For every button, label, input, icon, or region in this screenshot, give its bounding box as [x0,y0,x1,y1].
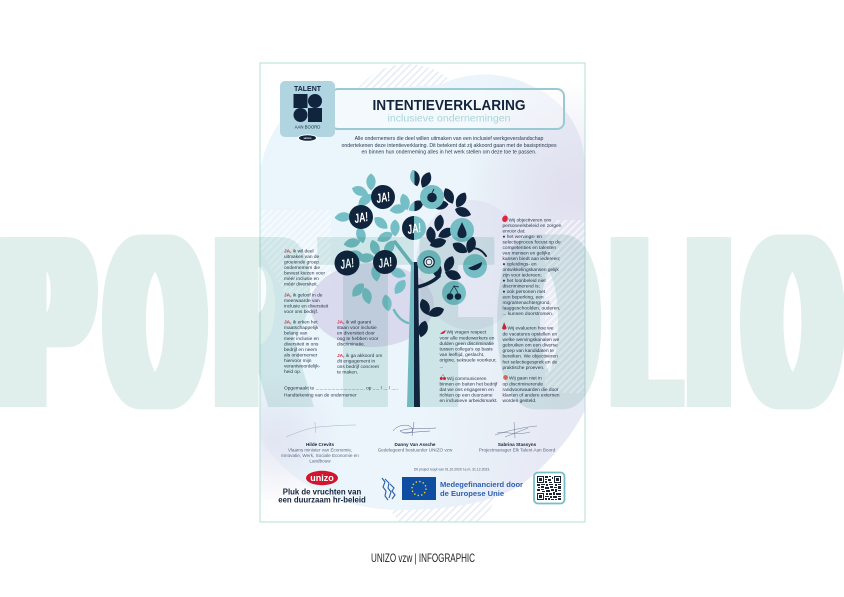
text block: evalueren: bereiken. We objectiveren [502,354,558,360]
text block: objectiveren: Wij objectiveren ons [508,218,552,224]
slogan: een duurzaam hr-beleid [278,496,366,504]
watermark: PORTFOLIO: O [506,184,592,460]
slogan: Pluk de vruchten van [283,488,361,496]
dark leaves [414,170,476,338]
watermark: PORTFOLIO: R [220,184,302,460]
tree illustration: JA! [377,254,394,271]
text block: evalueren: de vacatures opstellen en [502,331,557,337]
text block: communiceren: Wij communiceren [447,376,487,382]
text block: JA 3: diversiteit in ons [284,342,319,348]
text block: JA 3: ik erken het [291,320,318,326]
text block: JA 1: méér diversiteit. [284,281,318,287]
text block: objectiveren: ontwikkelingskansen gelijk [502,267,559,273]
text block: JA 4: JA, [337,320,345,326]
text block: communiceren: binnen en buiten het bedrijf [440,381,498,387]
text block: JA 3: bedrijf en neem [284,347,317,353]
text block: JA 5: dit engagement in [337,358,375,364]
text block: respect: Wij vragen respect [446,330,487,336]
names and roles: Gedelegeerd bestuurder UNIZO vzw [378,448,453,452]
text block: JA 3: belang van [284,331,308,337]
EU funding text: de Europese Unie [440,489,504,498]
text block: JA 1: JA, [284,248,292,254]
text block: JA 4: staan voor inclusie [337,325,377,331]
text block: signature line: Handtekening van de ondernemer [284,393,357,399]
signature: Danny Van Assche [393,422,436,436]
logo: Talent aan boord: TALENT [294,86,322,93]
text block: objectiveren: ervoor dat: [502,229,525,235]
text block: JA 2: JA, [284,293,292,299]
names and roles: Sabrina Stassyns [498,442,537,447]
text block: JA 3: meer inclusie en [284,336,319,342]
names and roles: Danny Van Assche [395,442,436,447]
text block: objectiveren: van mensen en gelijke [502,251,551,257]
text block: signature line: Opgemaakt te ..................................... op ..... / ... / ..... [284,386,398,392]
watermark: PORTFOLIO: O [749,184,836,460]
text block: JA 3: JA, [284,320,292,326]
icon: coconut [503,375,508,380]
text block: evalueren: het selectiegesprek en de [502,359,557,365]
text block: objectiveren: zijn voor iedereen; [502,273,542,279]
text block: objectiveren: discriminerend is; [502,284,540,290]
text block: JA 3: maatschappelijk [284,325,319,331]
text block: JA 5: ik ga akkoord om [344,353,382,359]
text block: JA 4: ik wil garant [344,320,372,326]
fruit badge: apple [420,185,444,209]
text block: communiceren: en inclusieve arbeidsmarkt. [440,398,498,404]
subtitle: inclusieve ondernemingen [388,114,510,124]
text block: niet discrimineren: Wij gaan niet in [509,376,542,382]
signature: Hilde Crevits [286,422,356,437]
text block: objectiveren: ● opleidings- en [502,262,537,268]
text block: objectiveren: ● het loonbeleid niet [502,278,546,284]
EU funding text: Medegefinancierd door [440,480,523,489]
EU flag [402,477,436,500]
panel: poster border [260,63,585,522]
intro text: en binnen hun onderneming alles in het werk stellen om deze toe te passen. [361,150,537,156]
title: INTENTIEVERKLARING [372,98,526,114]
text block: objectiveren: personeelsbeleid en zorgen [502,223,562,229]
text block: JA 2: inclusie en diversiteit [284,304,329,310]
names and roles [281,442,556,464]
text block: JA 5: ons bedrijf concreet [337,364,380,370]
signature: Sabrina Stassyns [495,422,537,438]
caption: UNIZO vzw | INFOGRAPHIC [371,551,475,565]
names and roles: Innovatie, Werk, Sociale Economie en [281,453,359,458]
text block: evalueren: Wij evalueren hoe we [508,326,554,332]
panel: poster background [260,63,585,538]
tree illustration: JA! [353,209,370,226]
text block: objectiveren: selectieproces focust op de [502,240,561,246]
text block: objectiveren: ● het wervings- en [502,234,542,240]
names and roles: Projectmanager Elk Talent Aan Boord [479,448,556,452]
logo: unizo: unizo [310,473,334,483]
text block: JA 3: hiervoor mijn [284,358,312,364]
icon: cherries [440,374,446,380]
tree illustration [334,169,487,407]
project dates: Dit project loopt van 01.10.2020 t.e.m. 31.12.2023. [414,468,490,472]
logo: unizo [306,471,338,485]
text block: JA 3: heid op. [284,369,301,375]
JA badges [334,185,426,276]
tree illustration: JA! [375,189,392,206]
teal leaves [334,169,426,312]
text block: evalueren: praktische proeven. [502,365,544,371]
text block: JA 1: uitmaken van de [284,254,320,260]
text block: respect: origine, seksuele voorkeur, [440,358,497,364]
text block: JA 2: meerwaarde van [284,298,320,304]
watermark: PORTFOLIO: O [111,184,199,460]
text block: objectiveren: ● ook personen met [502,289,546,295]
text block: niet discrimineren: randvoorwaarden die door [502,387,559,393]
fruit badge: pear [450,218,474,242]
text block: objectiveren: competenties en talenten [502,245,556,251]
text block: evalueren: groep van kandidaten te [502,348,554,354]
watermark: PORTFOLIO: I [693,184,725,460]
text block: objectiveren: kansen biedt aan iedereen; [502,256,560,262]
intro text: Alle ondernemers die deel willen uitmaken van een inclusief werkgeverslandschap [355,136,544,142]
text block: evalueren: gebruiken om een diverse [502,342,558,348]
text block: respect: voor alle medewerkers en [440,335,495,341]
watermark: PORTFOLIO: F [425,184,486,460]
text block: niet discrimineren: worden gesteld. [502,398,536,404]
intro text: ondertekenen deze intentieverklaring. Dit betekent dat zij akkoord gaan met de basisprincipes [341,143,557,149]
text block: respect: ... [440,364,444,369]
icon: apple [502,214,508,222]
logo: Talent aan boord [280,81,335,142]
tree illustration: JA! [339,255,356,272]
text block: communiceren: richten op een duurzame [440,393,493,399]
fruit badge: watermelon [463,254,487,278]
names and roles: Vlaams minister van Economie, [288,448,352,452]
fruit badge: cherries [442,281,466,305]
slogan [278,488,366,504]
EU funding text [440,480,523,498]
text block: JA 3: als ondernemer [284,353,318,359]
text block: communiceren: dat we ons engageren en [440,387,494,393]
text block: JA 4: oog te hebben voor [337,336,379,342]
text block: objectiveren: migrantenachtergrond, [502,300,551,306]
heading frame [331,89,564,129]
watermark: PORTFOLIO: P [6,184,87,460]
icon: watermelon [440,330,446,334]
text block: JA 1: bewust kiezen voor [284,270,325,276]
tree illustration: JA! [406,220,423,237]
text block: niet discrimineren: klanten of andere externen [502,392,560,398]
text block: objectiveren: een beperking, een [502,295,544,301]
fruit badge: coconut [417,250,441,274]
logo: Talent aan boord: AAN BOORD [295,124,320,130]
icon: pear [502,322,507,330]
text block: JA 1: ik wil deel [291,248,314,254]
text block: respect: dulden geen discriminatie [440,341,494,347]
watermark: PORTFOLIO: L [616,184,676,460]
text block: JA 1: ondernemers die [284,265,320,271]
text block: JA 5: JA, [337,353,345,359]
text block: JA 2: voor ons bedrijf. [284,309,318,315]
text block: JA 1: groeiende groep [284,259,319,265]
names and roles: Landbouw [309,458,331,464]
text block: JA 4: discriminatie. [337,342,365,348]
text block: respect: tussen collega's op basis [440,346,493,352]
QR code [534,472,564,504]
branches [394,242,486,323]
logo: Flemish lion [382,478,395,500]
text block: JA 3: verantwoordelijk- [284,364,321,370]
text block: JA 1: méér inclusie en [284,276,319,282]
text block: respect: van leeftijd, geslacht, [440,352,484,358]
text block: JA 4: en diversiteit door [337,331,375,337]
logo: Talent aan boord: unizo [304,136,312,140]
text block: objectiveren: ... kunnen doorstromen. [502,311,553,317]
trunk [407,262,420,407]
text block: niet discrimineren: op discriminerende [502,381,543,387]
text block: objectiveren: laaggeschoolden, ouderen, [502,306,560,312]
text block: JA 5: te maken. [337,370,358,376]
text block: evalueren: welke wervingskanalen we [502,337,560,343]
names and roles: Hilde Crevits [306,442,334,447]
text block: JA 2: ik geloof in de [291,293,323,299]
watermark: PORTFOLIO: T [330,184,401,460]
